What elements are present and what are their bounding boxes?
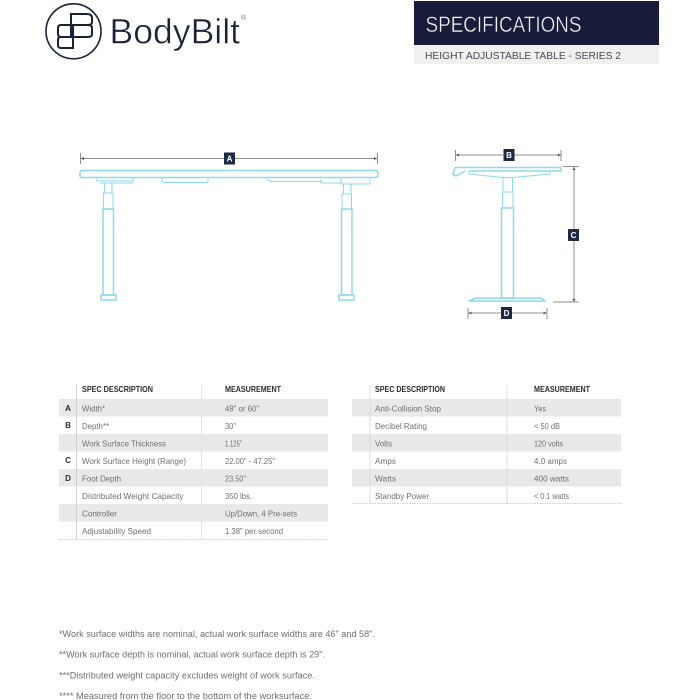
table top — [80, 170, 378, 178]
row values: 120 volts — [534, 438, 563, 448]
row labels: Adjustability Speed — [82, 526, 151, 536]
side table top — [453, 168, 561, 176]
row values — [534, 404, 569, 501]
row values: 400 watts — [534, 474, 569, 484]
row labels — [375, 404, 441, 501]
dimension B — [456, 149, 561, 161]
banner subtitle: HEIGHT ADJUSTABLE TABLE - SERIES 2 — [425, 50, 621, 62]
row labels — [82, 404, 186, 536]
row labels: Foot Depth — [82, 474, 121, 484]
dimension C — [553, 166, 579, 302]
row labels: Standby Power — [375, 491, 429, 501]
dimension C: C — [571, 231, 577, 240]
table header: MEASUREMENT — [534, 385, 590, 394]
row labels: Depth** — [82, 421, 110, 431]
table header — [82, 385, 281, 394]
row values: 1.38" per second — [225, 526, 283, 536]
row values: 1.125" — [225, 438, 242, 448]
row labels: Work Surface Thickness — [82, 438, 166, 448]
diagram: front view of table — [80, 152, 378, 300]
row keys: D — [65, 474, 71, 483]
dimension A — [80, 152, 378, 164]
table header: SPEC DESCRIPTION — [375, 385, 445, 394]
row values: 23.50" — [225, 474, 246, 484]
row labels: Work Surface Height (Range) — [82, 456, 186, 466]
row values: 48" or 60" — [225, 404, 259, 414]
row values: 22.00" - 47.25" — [225, 456, 275, 466]
side column — [502, 178, 514, 298]
row keys: B — [65, 421, 71, 430]
row values: 30" — [225, 421, 236, 431]
diagram: side view of table — [453, 149, 579, 319]
dimension D: D — [504, 309, 510, 318]
row keys: C — [65, 456, 71, 465]
row values: < 50 dB — [534, 421, 560, 431]
dimension A: A — [227, 154, 233, 164]
footnotes — [59, 629, 375, 700]
table header: SPEC DESCRIPTION — [82, 385, 153, 394]
banner title: SPECIFICATIONS — [426, 12, 582, 37]
row labels: Anti-Collision Stop — [375, 404, 441, 414]
row keys: A — [65, 404, 71, 413]
header: specifications banner — [414, 1, 659, 64]
table header: MEASUREMENT — [225, 385, 281, 394]
footnotes: *Work surface widths are nominal, actual work surface widths are 46" and 58". — [59, 629, 375, 639]
table header — [375, 385, 590, 394]
side foot — [469, 298, 546, 301]
row labels: Controller — [82, 508, 117, 518]
row values: Up/Down, 4 Pre-sets — [225, 508, 297, 518]
left leg — [101, 183, 116, 300]
row keys — [65, 404, 71, 483]
row labels: Width* — [82, 404, 106, 414]
row stripes — [59, 399, 328, 522]
logo: BodyBilt — [46, 4, 247, 59]
right leg — [339, 184, 354, 300]
wordmark: BodyBilt — [110, 12, 240, 52]
row labels: Distributed Weight Capacity — [82, 491, 184, 501]
row labels: Watts — [375, 474, 396, 484]
icon: circle B mark — [46, 4, 101, 59]
footnotes: ***Distributed weight capacity excludes weight of work surface. — [59, 670, 315, 680]
under-surface brackets — [97, 178, 370, 184]
table: right specifications — [352, 385, 621, 504]
row labels: Amps — [375, 456, 396, 466]
row values: Yes — [534, 404, 546, 414]
footnotes: **Work surface depth is nominal, actual work surface depth is 29". — [59, 650, 325, 660]
row values: 350 lbs. — [225, 491, 252, 501]
table: left specifications — [59, 385, 328, 540]
row values: < 0.1 watts — [534, 491, 569, 501]
row labels: Decibel Rating — [375, 421, 427, 431]
row values: 4.0 amps — [534, 456, 567, 466]
row labels: Volts — [375, 438, 392, 448]
row values — [225, 404, 297, 536]
registered mark: ® — [241, 14, 247, 22]
side under-structure — [469, 171, 550, 178]
dimension B: B — [506, 151, 512, 160]
row stripes — [352, 399, 621, 486]
dimension D — [468, 307, 547, 319]
